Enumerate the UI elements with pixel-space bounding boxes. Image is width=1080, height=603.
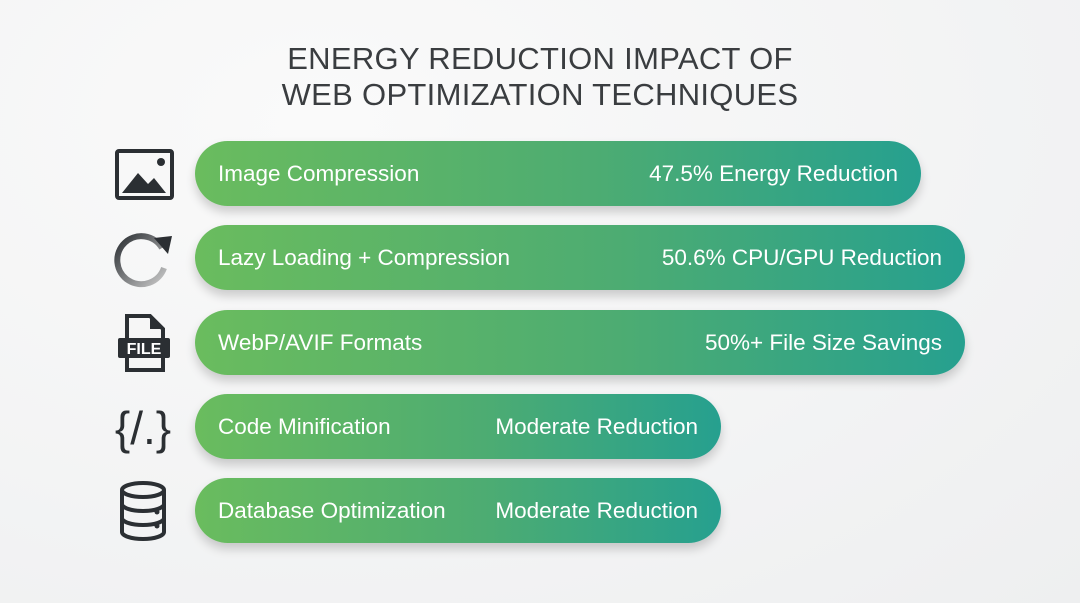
icon: code: {/.} — [115, 402, 171, 454]
bar: image compression: 47.5% Energy Reduction — [649, 161, 898, 186]
title — [282, 41, 798, 112]
bar: lazy loading: 50.6% CPU/GPU Reduction — [662, 245, 942, 270]
bar: image compression — [195, 141, 921, 206]
title: WEB OPTIMIZATION TECHNIQUES — [282, 77, 798, 112]
bar: database optimization: Database Optimization — [218, 498, 446, 523]
bar: database optimization: Moderate Reduction — [495, 498, 698, 523]
bar: database optimization — [195, 478, 721, 543]
icon: database — [120, 481, 166, 541]
icon: image — [115, 149, 174, 200]
bar: code minification: Code Minification — [218, 414, 391, 439]
bar: lazy loading — [195, 225, 965, 290]
bar: webp: WebP/AVIF Formats — [218, 330, 422, 355]
bar: webp — [195, 310, 965, 375]
bar: code minification — [195, 394, 721, 459]
bar: code minification: Moderate Reduction — [495, 414, 698, 439]
bar: image compression: Image Compression — [218, 161, 419, 186]
icon: reload — [114, 233, 172, 288]
icon: file: FILE — [127, 341, 162, 358]
title: ENERGY REDUCTION IMPACT OF — [287, 41, 793, 76]
bar: webp: 50%+ File Size Savings — [705, 330, 942, 355]
icon: file — [118, 314, 170, 372]
bar: lazy loading: Lazy Loading + Compression — [218, 245, 510, 270]
